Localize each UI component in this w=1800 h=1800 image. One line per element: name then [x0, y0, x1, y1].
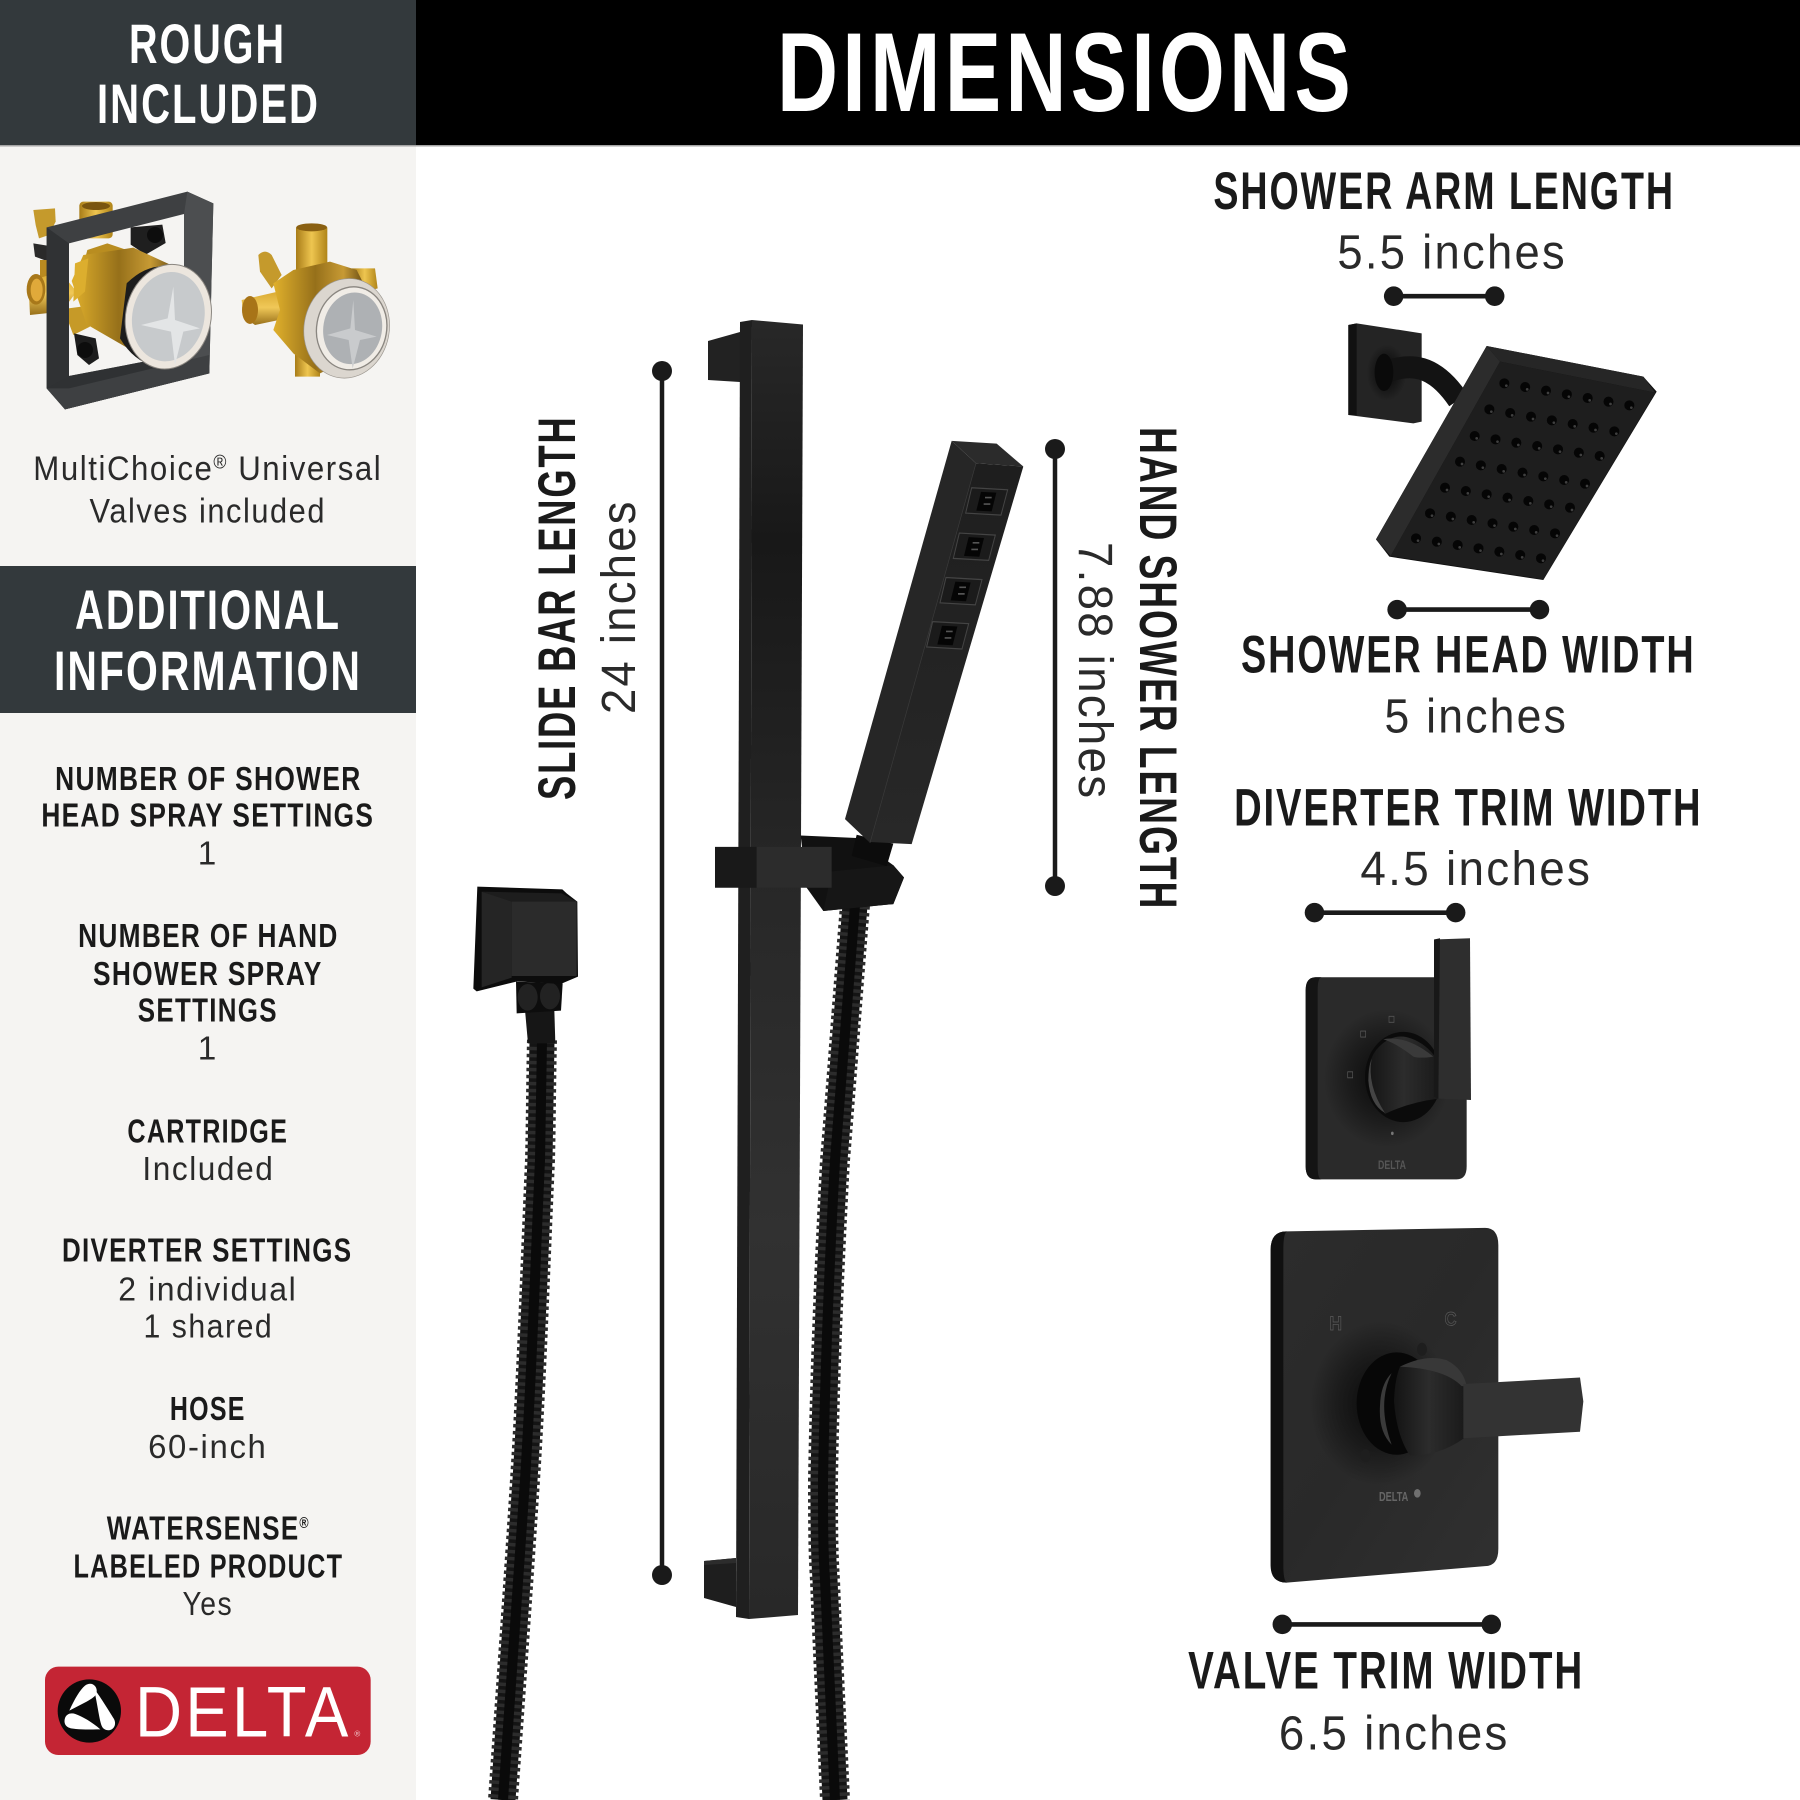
- diverter plate: [1306, 977, 1467, 1179]
- spec: shower head spray settings: 1: [198, 835, 218, 872]
- dimension: diverter trim width: 4.5 inches: [1360, 842, 1592, 896]
- heading: rough included: ROUGH: [129, 12, 286, 75]
- valve plate: [1271, 1228, 1498, 1583]
- dimension: valve trim width: VALVE TRIM WIDTH: [1188, 1642, 1584, 1701]
- dimension: hand shower length: HAND SHOWER LENGTH: [1128, 427, 1187, 910]
- spec: watersense: WATERSENSE: [107, 1510, 354, 1547]
- spec: hose: HOSE: [170, 1391, 246, 1428]
- spec: hand shower spray settings: 1: [198, 1031, 218, 1068]
- logo: delta: [45, 1667, 371, 1755]
- heading: rough included: [0, 0, 416, 146]
- text: multichoice caption: ®: [213, 451, 228, 473]
- valve plate: C: [1445, 1309, 1457, 1330]
- dimension: valve trim width: 6.5 inches: [1279, 1707, 1510, 1761]
- list: additional information specs: [41, 761, 374, 1623]
- dimension: slide bar length: SLIDE BAR LENGTH: [528, 415, 587, 800]
- spec: hand shower spray settings: SETTINGS: [138, 993, 278, 1030]
- spec: watersense: Yes: [183, 1586, 233, 1623]
- holder bracket: [801, 836, 904, 911]
- icon: valve trim: [1271, 1228, 1583, 1583]
- icon: valve without frame: [242, 223, 397, 385]
- heading: additional information: ADDITIONAL: [75, 578, 341, 641]
- diverter knob: [1365, 1032, 1442, 1122]
- text: multichoice caption: Valves included: [90, 492, 326, 530]
- spec: hose: 60-inch: [148, 1429, 267, 1466]
- valve plate: DELTA: [1379, 1490, 1409, 1504]
- valve lever: [1463, 1378, 1583, 1438]
- dimension: shower arm length: [1213, 162, 1675, 306]
- spray nozzle: [940, 578, 982, 605]
- spec: watersense: ®: [299, 1514, 310, 1532]
- dimension: shower head width: [1241, 600, 1696, 743]
- valve knob: [1357, 1343, 1467, 1462]
- head body: [1376, 346, 1657, 580]
- spec: shower head spray settings: [41, 761, 374, 872]
- spec: hand shower spray settings: NUMBER OF HAND: [78, 918, 339, 955]
- spec: cartridge: CARTRIDGE: [127, 1113, 288, 1150]
- shower arm: [1387, 367, 1458, 400]
- icon: valve with mounting frame: [27, 192, 221, 409]
- spec: cartridge: Included: [142, 1151, 274, 1188]
- hand shower body: [845, 441, 1023, 844]
- clamp: [715, 847, 832, 888]
- spec: diverter settings: [62, 1233, 352, 1345]
- spec: diverter settings: 2 individual: [118, 1272, 297, 1309]
- spec: cartridge: [127, 1113, 288, 1188]
- spec: watersense: LABELED PRODUCT: [73, 1548, 343, 1585]
- dimension: valve trim width: [1188, 1615, 1584, 1761]
- spec: hand shower spray settings: SHOWER SPRAY: [93, 956, 323, 993]
- dimension: hand shower length: 7.88 inches: [1068, 542, 1122, 800]
- neck: [852, 835, 893, 866]
- heading: additional information: INFORMATION: [54, 639, 362, 702]
- dimension: hand shower length: [1045, 427, 1187, 910]
- logo: delta: DELTA: [135, 1674, 352, 1753]
- spray nozzles: [1416, 383, 1631, 561]
- spec: shower head spray settings: HEAD SPRAY SETTINGS: [41, 798, 374, 835]
- icon: wall supply elbow: [473, 887, 578, 1043]
- text: multichoice caption: [33, 450, 382, 530]
- dimension: shower arm length: 5.5 inches: [1337, 226, 1567, 280]
- image: rough-in valves: [27, 192, 397, 409]
- text: multichoice caption: Universal: [228, 450, 382, 488]
- dimension: diverter trim width: [1234, 778, 1702, 922]
- spray nozzle: [927, 622, 969, 649]
- text: multichoice caption: MultiChoice: [33, 450, 232, 488]
- wall flange: [1348, 323, 1422, 423]
- spec: watersense: [73, 1510, 343, 1623]
- icon: slide bar: [704, 320, 803, 1619]
- hose: right: [823, 905, 855, 1800]
- dimension: slide bar length: 24 inches: [592, 499, 646, 714]
- spec: shower head spray settings: NUMBER OF SHOWER: [55, 761, 362, 798]
- spec: hand shower spray settings: [78, 918, 339, 1068]
- dimension: slide bar length: [528, 361, 672, 1585]
- valve plate: H: [1329, 1313, 1342, 1334]
- panel: left sidebar: [0, 0, 416, 1800]
- heading: rough included: INCLUDED: [97, 72, 320, 135]
- dimension: shower head width: 5 inches: [1384, 689, 1568, 743]
- icon: diverter trim: [1306, 938, 1471, 1179]
- logo: delta: ®: [354, 1730, 360, 1739]
- hose: left: [503, 1040, 542, 1800]
- spec: diverter settings: 1 shared: [144, 1308, 273, 1345]
- icon: hand shower with holder: [715, 441, 1023, 911]
- spray nozzle: [966, 488, 1008, 515]
- heading: additional information: [0, 566, 416, 713]
- spec: hose: [148, 1391, 267, 1466]
- spec: diverter settings: DIVERTER SETTINGS: [62, 1233, 352, 1270]
- icon: shower head: [1348, 323, 1657, 580]
- spray nozzle: [953, 533, 995, 560]
- diverter lever: [1434, 938, 1471, 1100]
- title bar: dimensions: DIMENSIONS: [777, 10, 1355, 135]
- title bar: dimensions: [0, 0, 1800, 146]
- diverter plate: DELTA: [1378, 1159, 1406, 1172]
